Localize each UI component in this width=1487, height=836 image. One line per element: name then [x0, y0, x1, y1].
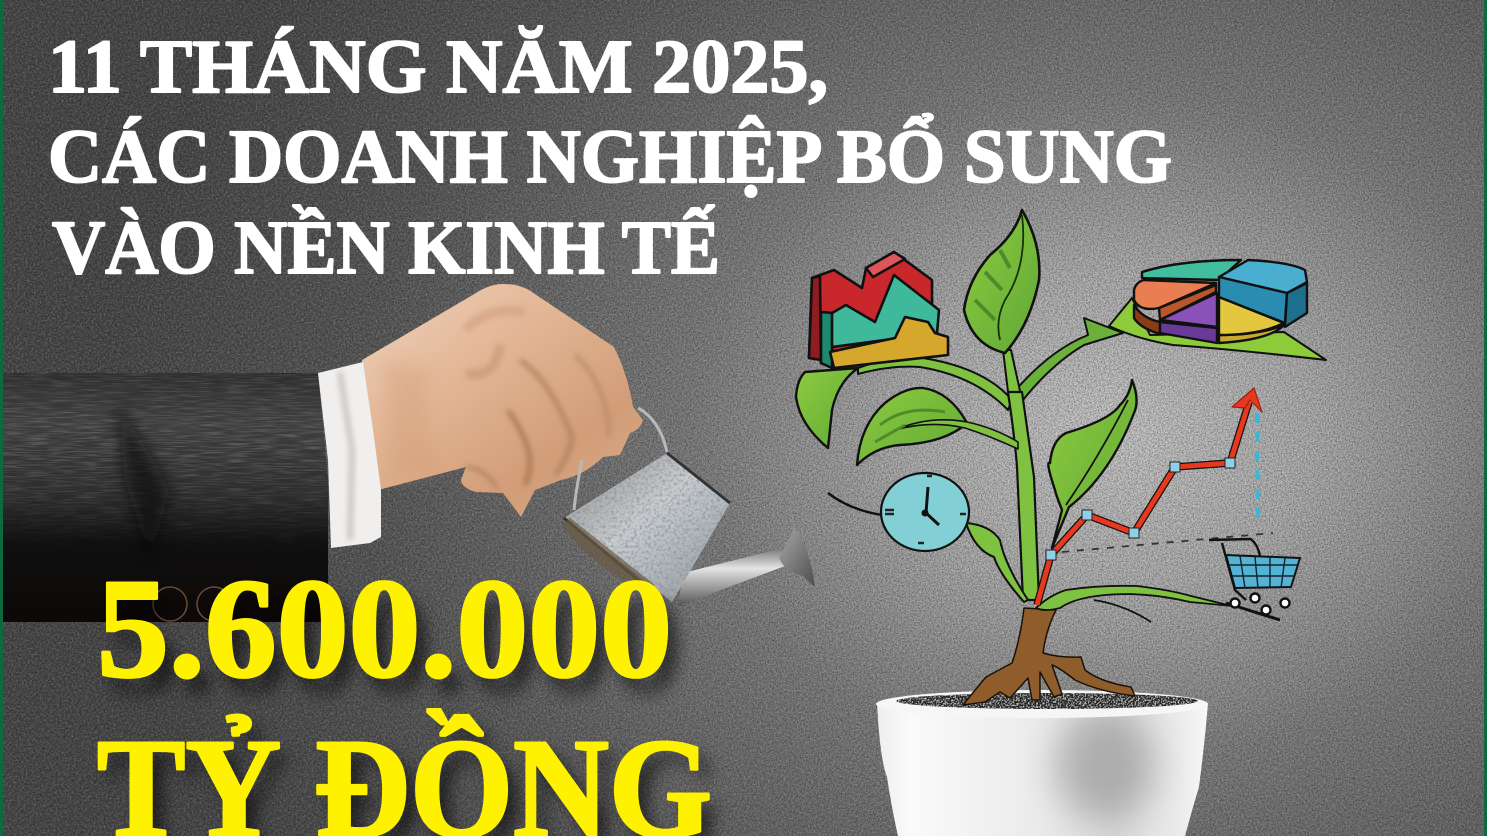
title line 1: 11 THÁNG NĂM 2025, [48, 25, 828, 109]
title [48, 25, 1172, 290]
left leaf [796, 368, 858, 448]
pie inner orange side [1159, 285, 1216, 320]
nodes [1046, 458, 1235, 560]
suit sleeve [3, 373, 328, 622]
can rose [779, 528, 815, 587]
pie leaf [1109, 298, 1326, 360]
pie blue right [1285, 283, 1307, 327]
can shadow edge [562, 518, 655, 590]
pot [876, 690, 1208, 836]
pie yellow side [1219, 325, 1284, 343]
shopping cart [1209, 539, 1300, 620]
clock [828, 473, 969, 551]
can body [564, 453, 730, 602]
small leaf under clock [966, 523, 1028, 602]
mountain chart [809, 252, 948, 368]
dark tendril [1094, 600, 1151, 622]
stem to top leaf [1003, 350, 1022, 400]
branches behind stem [858, 318, 1123, 410]
growth line arrow [1037, 388, 1273, 605]
pie blue front [1219, 277, 1287, 323]
title line 2: CÁC DOANH NGHIỆP BỔ SUNG [48, 114, 1172, 199]
main stem [1008, 392, 1039, 600]
can spout [678, 548, 785, 606]
pie segment purple [1160, 293, 1217, 327]
can rim [564, 453, 730, 590]
title line 3: VÀO NỀN KINH TẾ [52, 205, 720, 290]
bottom branch [1036, 586, 1232, 610]
pie blue top [1219, 260, 1307, 293]
amount: 5.600.000 [97, 549, 672, 707]
cuff shading [340, 372, 352, 540]
arrow head [1232, 388, 1262, 412]
upper-left branch [858, 358, 1012, 410]
trunk and roots [963, 608, 1135, 705]
shirt cuff [318, 362, 381, 548]
pie chart [1134, 260, 1307, 343]
red line [1037, 402, 1249, 605]
upper-right branch [1014, 318, 1123, 405]
big number shadow [108, 565, 723, 836]
big number shadow: 5.600.000 [108, 565, 683, 723]
pie purple side [1160, 322, 1217, 343]
pie segment yellow [1219, 297, 1284, 335]
pie segment orange [1134, 280, 1216, 309]
pie segment teal [1142, 260, 1241, 280]
top leaf [964, 210, 1039, 353]
pie side brown [1134, 305, 1160, 334]
middle-left leaf [857, 388, 1018, 465]
arm with suit sleeve [3, 284, 643, 622]
can handle [574, 408, 667, 510]
potted plant [796, 210, 1326, 836]
big number highlight [97, 549, 712, 836]
watering can [562, 408, 815, 606]
right leaf [1048, 380, 1137, 548]
hand [362, 284, 643, 517]
dashed guide lines [1257, 413, 1258, 527]
